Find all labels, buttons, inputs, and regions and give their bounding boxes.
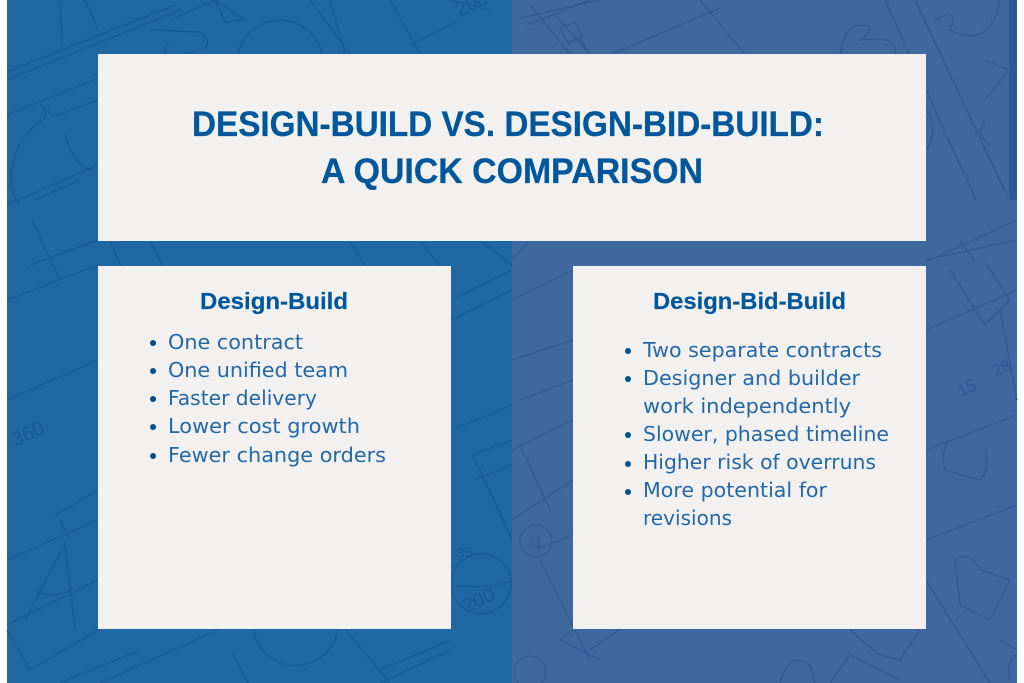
list: Design-Build points: Faster delivery	[168, 386, 317, 410]
panel: Design-Build	[98, 266, 451, 629]
background: right blueprint half: 31	[527, 534, 543, 550]
background: left blueprint half: 35	[456, 545, 473, 562]
heading: Design-Build: Design-Build	[200, 288, 348, 314]
list: Design-Build points: Lower cost growth	[168, 414, 360, 438]
background: left blueprint half: 360	[8, 417, 48, 451]
background: left blueprint half: 200	[459, 584, 499, 618]
list: Design-Build points: One unified team	[168, 358, 348, 382]
heading: Design-Bid-Build: Design-Bid-Build	[653, 288, 846, 314]
list: Design-Build points: Fewer change orders	[168, 443, 386, 467]
list: Design-Build points	[150, 330, 386, 467]
title text: A QUICK COMPARISON	[321, 152, 703, 191]
list: Design-Bid-Build points: Higher risk of overruns	[643, 450, 876, 474]
list: Design-Bid-Build points: Designer and builder	[643, 366, 861, 390]
title panel	[98, 54, 926, 241]
background: right blueprint half: 15	[954, 376, 979, 401]
list: Design-Build points: One contract	[168, 330, 303, 354]
panel: Design-Bid-Build	[573, 266, 926, 629]
background: right blueprint half	[512, 0, 1017, 683]
title text	[192, 105, 824, 191]
list: Design-Bid-Build points: Two separate contracts	[642, 338, 882, 362]
background: left blueprint half	[7, 0, 512, 683]
list: Design-Bid-Build points: work independently	[643, 394, 851, 418]
background: right blueprint half: 28	[989, 356, 1014, 381]
title text: DESIGN-BUILD VS. DESIGN-BID-BUILD:	[192, 105, 824, 144]
list: Design-Bid-Build points: revisions	[643, 506, 732, 530]
list: Design-Bid-Build points: More potential for	[643, 478, 828, 502]
list: Design-Bid-Build points: Slower, phased timeline	[643, 422, 889, 446]
list: Design-Bid-Build points	[625, 338, 889, 530]
